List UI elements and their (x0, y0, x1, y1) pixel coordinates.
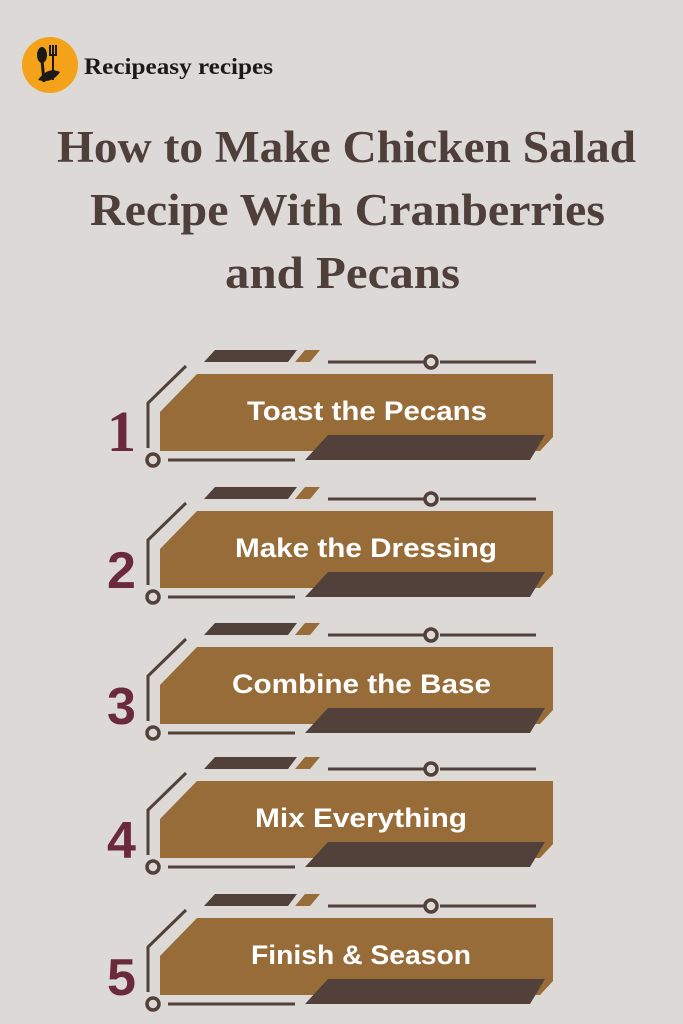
step 3 label: Combine the Base (232, 669, 491, 699)
title: Recipe With Cranberries (90, 185, 605, 235)
title: and Pecans (225, 248, 460, 298)
step 5 (107, 894, 553, 1010)
step 3 (107, 623, 553, 739)
number 1: 1 (107, 399, 136, 464)
step 2 label: Make the Dressing (235, 533, 497, 563)
number 3: 3 (107, 678, 136, 736)
title: How to Make Chicken Salad (57, 122, 636, 172)
icon: logo badge (22, 37, 78, 93)
step 4 label: Mix Everything (255, 803, 467, 833)
number 5: 5 (107, 949, 136, 1007)
step 5 label: Finish & Season (251, 940, 471, 970)
number 2: 2 (107, 542, 136, 600)
number 4: 4 (107, 812, 136, 870)
step 1 (107, 350, 553, 466)
logo (22, 37, 273, 93)
title (57, 122, 636, 298)
logo text: Recipeasy recipes (84, 54, 273, 79)
step 4 (107, 757, 553, 873)
step 2 (107, 487, 553, 603)
step 1 label: Toast the Pecans (247, 396, 487, 426)
